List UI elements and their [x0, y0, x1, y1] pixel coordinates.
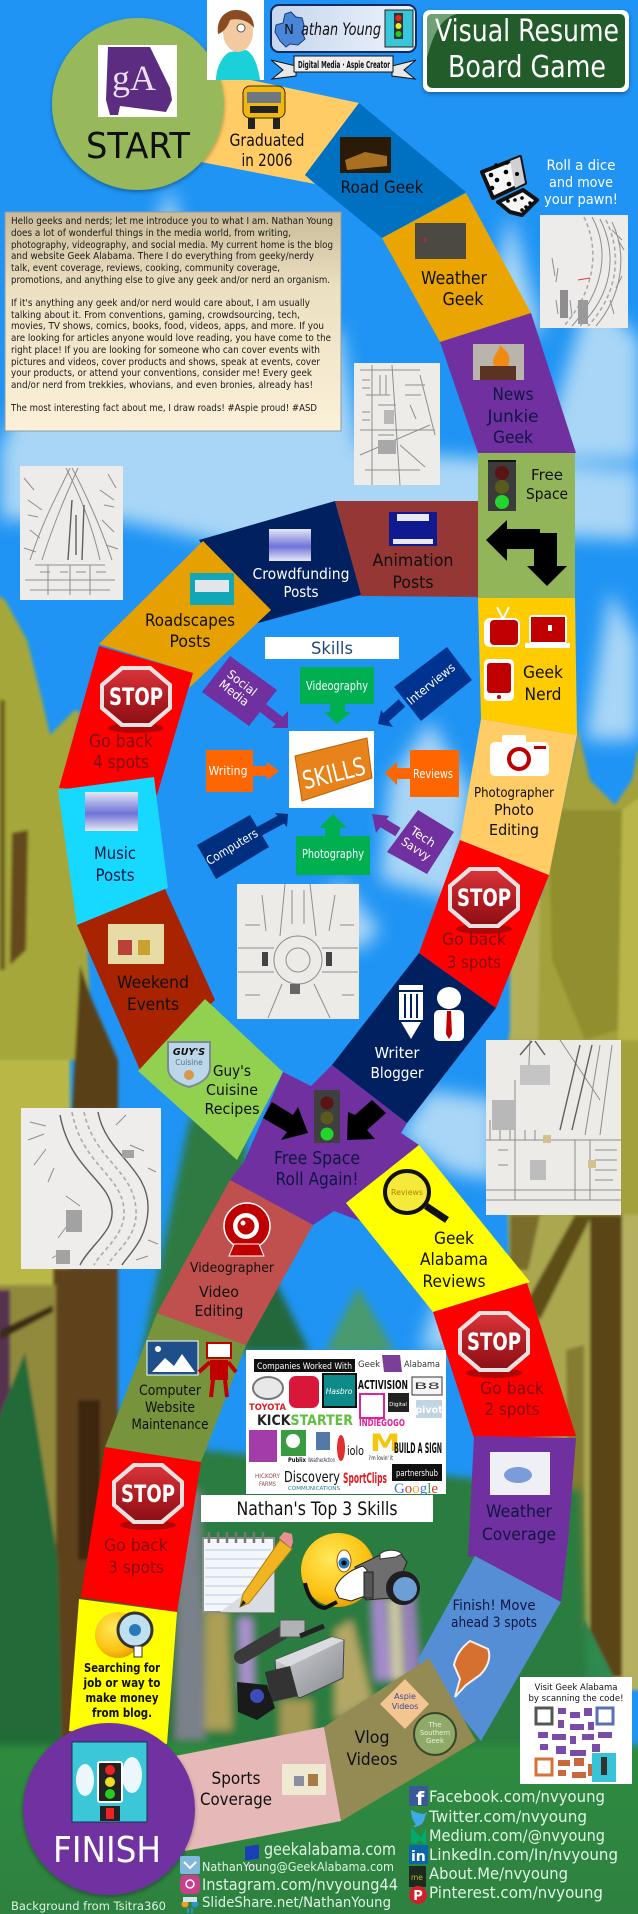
icon: gA alabama logo: gA: [112, 58, 156, 98]
companies panel: M: [370, 1429, 400, 1457]
skill: reviews: Reviews: [413, 767, 453, 781]
contact links: NathanYoung@GeekAlabama.com: [202, 1860, 394, 1874]
skills image: SKILLS: [299, 752, 368, 795]
icon: traffic light: [314, 1090, 340, 1143]
icon: traffic light: [488, 460, 516, 511]
skill: tech savvy: Savvy: [399, 834, 433, 864]
icon: smiley with camera: [301, 1533, 420, 1608]
top skills heading: [201, 1495, 433, 1522]
space: go back 4 spots: [59, 646, 193, 795]
space: videographer video editing: Video: [199, 1283, 239, 1301]
space: go back 2 spots: [433, 1283, 576, 1438]
space: news junkie geek: Junkie: [487, 407, 538, 427]
social links: Facebook.com/nvyoung: [429, 1787, 605, 1806]
space: videographer video editing: Editing: [194, 1302, 244, 1320]
icon: aspie videos diamond: Videos: [392, 1702, 418, 1711]
icon: stop sign: [112, 1463, 184, 1530]
icon: southern geek circle: Southern: [420, 1729, 450, 1737]
space: music posts: [58, 777, 168, 925]
qr code panel: [520, 1677, 632, 1784]
space: computer website maintenance: [105, 1313, 246, 1462]
arrow: pointing to light from left: [263, 1102, 308, 1140]
arrow: turn arrows: [486, 520, 567, 586]
icon: medium: [411, 1828, 426, 1846]
space: crowdfunding posts: Crowdfunding: [252, 565, 350, 583]
companies panel: iolo: [347, 1444, 364, 1458]
space: go back 2 spots: Go back: [480, 1379, 544, 1399]
space: weekend events: Weekend: [117, 973, 189, 993]
contact links: SlideShare.net/NathanYoung: [202, 1895, 391, 1911]
space: news junkie geek: Geek: [493, 428, 533, 448]
qr code panel: by scanning the code!: [528, 1694, 624, 1704]
bio panel: your products, or attend your conventions, consider me! Every geek: [11, 368, 312, 379]
title sign: [423, 10, 629, 92]
space: searching for job: make money: [86, 1691, 159, 1705]
skill: reviews: [385, 750, 459, 797]
qr code panel: Visit Geek Alabama: [534, 1683, 618, 1693]
space: photographer photo editing: Photographer: [474, 785, 554, 801]
icon: picture: [147, 1341, 198, 1375]
space: crowdfunding posts: [199, 501, 361, 623]
space: vlog videos: [324, 1658, 476, 1821]
companies panel: COMMUNICATIONS: [288, 1486, 340, 1492]
icon: southern geek circle: [414, 1713, 456, 1755]
title sign: Board Game: [448, 50, 606, 85]
space: go back 3 spots right: Go back: [442, 930, 506, 950]
space: road geek: Road Geek: [340, 178, 424, 198]
icon: small traffic light tile: [385, 10, 413, 47]
space: searching for job: Searching for: [84, 1661, 160, 1675]
bio panel: and/or nerd from trekkies, whovians, and even bronies, already has!: [11, 380, 313, 391]
icon: red phone: [484, 659, 514, 701]
companies panel: ACTIVISION: [358, 1378, 408, 1392]
companies panel: WeatherAction: [308, 1457, 335, 1464]
icon: camera: [490, 735, 549, 776]
icon: pinterest: [409, 1886, 427, 1904]
space: animation posts: [335, 501, 478, 597]
icon: stop sign: [100, 666, 172, 733]
space: sports coverage: Sports: [212, 1769, 261, 1789]
space: searching for job: from blog.: [92, 1706, 152, 1720]
space: weather geek: [382, 193, 531, 342]
icon: slideshare: [182, 1897, 198, 1913]
icon: facebook: f: [416, 1788, 425, 1810]
contact links: Instagram.com/nvyoung44: [202, 1875, 398, 1894]
icon: southern geek circle: The: [427, 1721, 442, 1729]
space: videographer video editing: Videographer: [190, 1260, 274, 1276]
social links: Twitter.com/nvyoung: [428, 1807, 587, 1826]
icon: blue puzzle piece: N: [284, 23, 294, 38]
space: sports coverage: [175, 1727, 341, 1851]
sketch: winding road: [21, 1108, 161, 1269]
icon: pencil: [399, 985, 423, 1039]
skill: writing: Writing: [208, 764, 248, 778]
icon: stop sign: [448, 867, 520, 934]
finish circle: FINISH: [53, 1830, 161, 1871]
background credit: Background from Tsitra360: [11, 1899, 166, 1913]
space: roadscapes posts: Posts: [170, 632, 211, 652]
space: go back 4 spots: Go back: [89, 732, 154, 752]
space: searching for job: [69, 1599, 177, 1744]
icon: stop sign: STOP: [121, 1480, 175, 1508]
bio panel: talk, event coverage, reviews, cooking, community coverage,: [11, 263, 280, 274]
icon: monitor: [245, 1845, 259, 1867]
social links: LinkedIn.com/In/nvyoung: [429, 1845, 618, 1864]
bio panel: Hello geeks and nerds; let me introduce you to what I am. Nathan Young: [11, 216, 333, 227]
icon: robot: [199, 1343, 236, 1397]
space: photographer photo editing: Photo: [494, 801, 534, 819]
nathan young logo: athan Young: [301, 20, 381, 40]
space: free space with turn arrows: [478, 453, 575, 598]
skill: photography: Photography: [302, 847, 364, 861]
space: go back 3 spots left: Go back: [104, 1536, 168, 1556]
space: free space roll again: Free Space: [274, 1149, 360, 1169]
icon: school bus: [243, 86, 285, 129]
space: graduated: in 2006: [242, 151, 292, 170]
icon: aspie videos diamond: [380, 1679, 429, 1729]
companies panel: FARMS: [259, 1480, 276, 1488]
right tree foliage: [508, 730, 638, 1690]
companies panel: [246, 1350, 446, 1497]
icon: pinterest: P: [413, 1889, 423, 1904]
space: weather geek: Geek: [442, 290, 484, 310]
companies panel: Geek: [358, 1360, 381, 1370]
space: go back 3 spots right: [419, 840, 549, 1008]
space: weather coverage: Coverage: [482, 1525, 556, 1545]
icon: guy's cuisine badge: [168, 1042, 210, 1087]
space: animation posts: Animation: [372, 551, 454, 571]
space: geek alabama reviews: Alabama: [420, 1250, 488, 1270]
space: computer website maintenance: Maintenance: [132, 1417, 208, 1433]
space: searching for job: job or way to: [83, 1676, 160, 1690]
space: guy's cuisine recipes: Cuisine: [206, 1081, 258, 1099]
skill: social media: Social: [224, 667, 260, 699]
space: finish move ahead: ahead 3 spots: [451, 1615, 537, 1631]
space: graduated: Graduated: [230, 131, 304, 150]
skill: photography: [296, 814, 370, 875]
bio panel: If it's anything any geek and/or nerd would care about, I am usually: [11, 298, 310, 309]
companies panel: HICKORY: [255, 1472, 280, 1480]
space: free space roll again: Roll Again!: [276, 1170, 358, 1190]
start circle: START: [86, 126, 191, 167]
space: geek alabama reviews: Reviews: [422, 1272, 486, 1292]
sketch: centre road map: [354, 363, 440, 485]
social links: About.Me/nvyoung: [429, 1864, 568, 1883]
icon: aspie videos diamond: Aspie: [394, 1692, 416, 1701]
icon: linkedin: in: [411, 1849, 426, 1865]
companies panel: INDIEGOGO: [359, 1418, 405, 1429]
bio panel: movies, TV shows, comics, books, food, videos, apps, and more. If you: [11, 321, 324, 332]
sketch: left interchange: [20, 466, 123, 600]
space: go back 3 spots right: 3 spots: [447, 953, 501, 973]
contact links: [180, 1840, 398, 1913]
sketch: street grid: [486, 1040, 621, 1215]
social links: Pinterest.com/nvyoung: [429, 1883, 603, 1902]
space: crowdfunding posts: Posts: [284, 583, 318, 601]
space: go back 3 spots left: 3 spots: [108, 1558, 164, 1578]
bio panel: pictures and videos, cover products and shows, speak at events, cover: [11, 357, 321, 368]
space: guy's cuisine recipes: Recipes: [204, 1100, 260, 1118]
space: free space with turn arrows: Free: [531, 466, 563, 484]
icon: southern geek circle: Geek: [426, 1737, 445, 1745]
arrow: pointing to light from right: [347, 1100, 386, 1140]
skills image: [289, 731, 374, 808]
space: free space roll again: [230, 1065, 419, 1225]
space: free space with turn arrows: Space: [526, 485, 568, 503]
icon: blue puzzle piece: [275, 12, 305, 47]
ribbon: [271, 56, 416, 79]
bio panel: talking about it. From conventions, gaming, crowdsourcing, tech,: [11, 310, 300, 321]
space: road geek: [305, 103, 466, 238]
space: weather coverage: [468, 1436, 576, 1602]
icon: video camera: [237, 1620, 344, 1720]
space: go back 3 spots left: [81, 1447, 201, 1612]
companies panel: Companies Worked With: [257, 1362, 352, 1372]
companies panel: Hasbro: [326, 1387, 353, 1396]
icon: webcam: [224, 1203, 270, 1256]
companies panel: SportClips: [343, 1471, 387, 1487]
bio panel: [5, 212, 341, 431]
avatar character: [207, 0, 264, 80]
space: videographer video editing: [157, 1180, 313, 1345]
companies panel: Publix: [288, 1456, 307, 1464]
space: roadscapes posts: [99, 541, 271, 688]
skill: tech savvy: [372, 810, 454, 874]
bio panel: The most interesting fact about me, I draw roads! #Aspie proud! #ASD: [10, 403, 317, 414]
social links: [409, 1786, 618, 1904]
bio panel: are looking for articles anyone would love reading, you have come to the: [11, 333, 331, 344]
space: computer website maintenance: Computer: [139, 1383, 201, 1399]
bio panel: promotions, and anything else to give any geek and/or nerd an organism.: [11, 275, 330, 286]
space: go back 2 spots: 2 spots: [484, 1400, 540, 1420]
top skills heading: Nathan's Top 3 Skills: [236, 1498, 398, 1520]
skill: videography: [300, 667, 374, 724]
icon: email: [180, 1856, 200, 1874]
icon: stop sign: STOP: [467, 1328, 521, 1356]
space: news junkie geek: [440, 313, 576, 453]
skills heading: [265, 637, 399, 659]
space: weekend events: Events: [127, 995, 179, 1015]
icon: stop sign: STOP: [457, 884, 511, 912]
space: computer website maintenance: Website: [145, 1400, 195, 1416]
forest: [100, 1118, 590, 1760]
skill: social media: [202, 656, 288, 728]
icon: person with tie: [434, 987, 464, 1041]
skill: computers: [197, 813, 288, 879]
space: guy's cuisine recipes: Guy's: [213, 1062, 251, 1080]
roll dice text: [544, 158, 618, 208]
space: guy's cuisine recipes: [138, 999, 283, 1160]
finish circle: [23, 1723, 195, 1895]
space: geek alabama reviews: [346, 1145, 530, 1312]
ribbon: Digital Media · Aspie Creator: [298, 60, 390, 71]
companies panel: Google: [394, 1481, 438, 1497]
icon: guy's cuisine badge: Cuisine: [175, 1058, 203, 1067]
icon: facebook: [409, 1786, 428, 1810]
space: weekend events: [77, 889, 215, 1070]
space: graduated: [201, 73, 359, 184]
roll dice text: and move: [549, 175, 613, 191]
space: writer blogger: Blogger: [370, 1064, 424, 1082]
skill: tech savvy: Tech: [407, 823, 438, 850]
roll dice text: Roll a dice: [546, 158, 616, 174]
space: music posts: Posts: [96, 866, 135, 886]
companies panel: pivot: [415, 1405, 443, 1416]
start circle: [52, 18, 224, 190]
space: photographer photo editing: [460, 719, 577, 875]
bio panel: photography, videography, and social media. My current home is the blog: [11, 240, 333, 251]
companies panel: TOYOTA: [249, 1403, 286, 1413]
skill: interviews: [378, 647, 472, 727]
icon: red laptop: [525, 615, 570, 648]
companies panel: partnershub: [396, 1469, 438, 1479]
space: music posts: Music: [94, 844, 136, 864]
icon: notepad and pencil: [203, 1532, 293, 1612]
left tree foliage: [0, 590, 118, 1760]
space: sports coverage: Coverage: [200, 1790, 272, 1810]
icon: linkedin: [409, 1845, 428, 1865]
roll dice text: your pawn!: [544, 192, 618, 208]
icon: about.me: me: [411, 1873, 423, 1882]
contact links: geekalabama.com: [264, 1840, 396, 1859]
icon: stop sign: STOP: [109, 683, 163, 711]
icon: finish traffic light: [72, 1742, 147, 1822]
icon: magnifier: [385, 1171, 447, 1220]
space: roadscapes posts: Roadscapes: [145, 611, 235, 631]
sketch: roundabout: [237, 884, 359, 1019]
icon: dice: [482, 157, 537, 215]
space: news junkie geek: News: [492, 385, 534, 405]
bio panel: and website Geek Alabama. There I do everything from geeky/nerdy: [11, 251, 314, 262]
space: geek nerd: Nerd: [524, 685, 562, 705]
social links: Medium.com/@nvyoung: [429, 1826, 605, 1845]
skill: interviews: Interviews: [404, 660, 458, 708]
skills heading: Skills: [311, 639, 353, 659]
icon: smiley with magnifier: [95, 1612, 152, 1658]
space: finish move ahead: Finish! Move: [452, 1598, 536, 1614]
icon: gA alabama logo: [98, 45, 177, 117]
icon: instagram: [180, 1875, 200, 1894]
QR code: [536, 1708, 616, 1782]
space: animation posts: Posts: [392, 573, 434, 593]
space: writer blogger: [332, 953, 496, 1123]
companies panel: Digital: [389, 1402, 407, 1408]
nathan young logo: [271, 5, 416, 79]
space: weather geek: Weather: [421, 269, 488, 289]
space: geek alabama reviews: Geek: [434, 1229, 474, 1249]
space: geek nerd: [478, 598, 577, 735]
icon: stop sign: [458, 1311, 530, 1378]
icon: magnifier: Reviews: [391, 1188, 423, 1197]
icon: about.me: [409, 1866, 426, 1887]
companies panel: i'm lovin' it: [369, 1455, 393, 1462]
skill: social media: Media: [216, 677, 252, 709]
space: writer blogger: Writer: [374, 1044, 420, 1062]
companies panel: KICKSTARTER: [257, 1413, 353, 1429]
bio panel: right place! If you are looking for someone who can cover events with: [11, 345, 320, 356]
space: finish move ahead: [417, 1556, 561, 1741]
space: photographer photo editing: Editing: [489, 821, 539, 839]
space: go back 4 spots: 4 spots: [93, 753, 149, 773]
space: vlog videos: Vlog: [354, 1728, 390, 1748]
space: vlog videos: Videos: [346, 1750, 398, 1770]
companies panel: Alabama: [404, 1360, 440, 1370]
icon: guy's cuisine badge: GUY'S: [173, 1047, 205, 1058]
space: geek nerd: Geek: [523, 663, 563, 683]
skill: writing: [206, 750, 279, 792]
text: BUILD A SIGN: [394, 1441, 442, 1457]
bio panel: does a lot of wonderful things in the media world, from writing,: [11, 228, 291, 239]
icon: red tv: [484, 607, 520, 647]
icon: twitter: [411, 1810, 427, 1827]
companies panel: B8: [414, 1382, 441, 1392]
companies panel: Discovery: [284, 1468, 340, 1486]
sketch: top right road drawing: [540, 215, 628, 328]
skills diagram: [197, 637, 472, 879]
icon: pointing hand: [454, 1641, 489, 1697]
skill: computers: Computers: [204, 826, 260, 868]
space: weather coverage: Weather: [486, 1502, 552, 1522]
skill: videography: Videography: [306, 679, 368, 693]
